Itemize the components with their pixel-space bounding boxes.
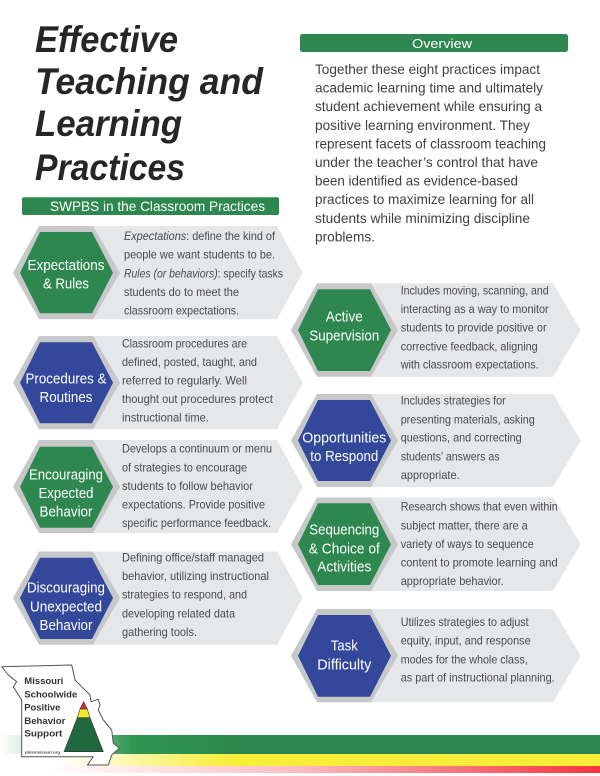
panel: Opportunities to Respond: to Respond <box>310 449 378 465</box>
panel: Task Difficulty <box>291 609 581 702</box>
logo: Missouri map with pyramid: pbismissouri.org <box>25 750 61 754</box>
panel: Expectations & Rules: students do to meet the <box>124 285 239 299</box>
panel: Procedures & Routines: referred to regularly. Well <box>122 374 247 388</box>
panel: Task Difficulty: Difficulty <box>317 657 372 673</box>
panel: Encouraging Expected Behavior: expectations. Provide positive <box>122 498 265 512</box>
overview text <box>315 62 546 244</box>
panel: Expectations & Rules: Rules (or behaviors): specify tasks <box>124 266 283 280</box>
panel: Encouraging Expected Behavior: Encouraging <box>29 467 103 483</box>
panel: Expectations & Rules: classroom expectations. <box>124 303 239 317</box>
panel: Expectations & Rules: & Rules <box>43 277 89 293</box>
overview text: under the teacher’s control that have <box>315 155 538 170</box>
panel: Active Supervision: Active <box>326 310 363 326</box>
panel: Sequencing & Choice of Activities: variety of ways to sequence <box>401 537 534 551</box>
panel: Discouraging Unexpected Behavior: Defining office/staff managed <box>122 551 264 565</box>
panel: Discouraging Unexpected Behavior: behavior, utilizing instructional <box>122 569 269 583</box>
section heading: SWPBS in the Classroom Practices: SWPBS in the Classroom Practices <box>50 199 265 214</box>
logo: Missouri map with pyramid: Behavior <box>24 716 66 726</box>
panel: Sequencing & Choice of Activities: & Choice of <box>309 541 381 557</box>
panel: Sequencing & Choice of Activities: appropriate behavior. <box>401 574 504 588</box>
panel: Active Supervision <box>291 283 581 377</box>
panel: Opportunities to Respond: Includes strategies for <box>401 393 506 407</box>
logo: Missouri map with pyramid: Missouri <box>24 676 63 686</box>
panel: Sequencing & Choice of Activities: Activities <box>317 560 371 576</box>
panel: Sequencing & Choice of Activities: content to promote learning and <box>401 556 558 570</box>
panel: Encouraging Expected Behavior: Behavior <box>40 505 93 521</box>
panel: Expectations & Rules: Expectations <box>28 258 104 274</box>
panel: Expectations & Rules <box>13 226 303 319</box>
panel: Encouraging Expected Behavior: students to follow behavior <box>122 479 253 493</box>
panel: Sequencing & Choice of Activities: subject matter, there are a <box>401 518 528 532</box>
overview text: practices to maximize learning for all <box>315 192 534 207</box>
title <box>35 19 264 188</box>
overview text: student achievement while ensuring a <box>315 99 542 114</box>
title: Practices <box>35 147 185 188</box>
overview heading <box>300 34 568 52</box>
panel: Opportunities to Respond: questions, and correcting <box>401 431 522 445</box>
panel: Task Difficulty: as part of instructional planning. <box>401 671 555 685</box>
panel: Sequencing & Choice of Activities: Research shows that even within <box>401 500 558 514</box>
panel: Discouraging Unexpected Behavior <box>13 551 303 645</box>
panel: Encouraging Expected Behavior <box>13 440 303 533</box>
panel: Encouraging Expected Behavior: Develops a continuum or menu <box>122 442 272 456</box>
overview text: problems. <box>315 229 375 244</box>
logo: Missouri map with pyramid: Schoolwide <box>24 690 77 700</box>
panel: Procedures & Routines: Classroom procedures are <box>122 336 247 350</box>
panel: Opportunities to Respond: Opportunities <box>302 430 386 446</box>
panel: Discouraging Unexpected Behavior: developing related data <box>122 607 235 621</box>
footer color bands <box>0 735 600 773</box>
overview text: students while minimizing discipline <box>315 211 530 226</box>
logo: Missouri map with pyramid: Support <box>24 729 62 739</box>
panel: Discouraging Unexpected Behavior: strategies to respond, and <box>122 588 247 602</box>
panel: Encouraging Expected Behavior: Expected <box>38 486 94 502</box>
panel: Encouraging Expected Behavior: of strategies to encourage <box>122 460 247 474</box>
panel: Task Difficulty: equity, input, and response <box>401 634 531 648</box>
panel: Encouraging Expected Behavior: specific performance feedback. <box>122 516 271 530</box>
panel: Active Supervision: students to provide positive or <box>401 321 547 335</box>
panel: Active Supervision: Supervision <box>309 329 379 345</box>
overview text: academic learning time and ultimately <box>315 81 543 96</box>
panel: Procedures & Routines: Routines <box>40 390 92 406</box>
panel: Task Difficulty: modes for the whole class, <box>401 652 528 666</box>
title: Teaching and <box>35 61 264 102</box>
panel: Sequencing & Choice of Activities: Sequencing <box>309 522 379 538</box>
panel: Procedures & Routines: Procedures & <box>26 371 107 387</box>
panel: Procedures & Routines: instructional time. <box>122 411 209 425</box>
panel: Task Difficulty: Utilizes strategies to adjust <box>401 615 529 629</box>
panel: Opportunities to Respond: students’ answers as <box>401 449 500 463</box>
overview text: Together these eight practices impact <box>315 62 540 77</box>
panel: Procedures & Routines: thought out procedures protect <box>122 392 274 406</box>
title: Learning <box>35 103 182 144</box>
panel: Active Supervision: interacting as a way to monitor <box>401 302 549 316</box>
panel: Discouraging Unexpected Behavior: Discouraging <box>27 581 105 597</box>
panel: Opportunities to Respond <box>291 393 581 487</box>
panel: Opportunities to Respond: appropriate. <box>401 468 460 482</box>
panel: Discouraging Unexpected Behavior: Behavior <box>40 618 93 634</box>
title: Effective <box>35 19 178 60</box>
panel: Discouraging Unexpected Behavior: Unexpected <box>30 600 102 616</box>
panel: Active Supervision: with classroom expectations. <box>400 358 539 372</box>
panel: Task Difficulty: Task <box>331 639 359 655</box>
panel: Expectations & Rules: people we want students to be. <box>124 248 275 262</box>
panel: Expectations & Rules: Expectations: define the kind of <box>124 229 276 243</box>
logo: Missouri map with pyramid: Positive <box>24 703 60 713</box>
overview text: positive learning environment. They <box>315 118 530 133</box>
overview text: represent facets of classroom teaching <box>315 136 546 151</box>
panel: Active Supervision: Includes moving, scanning, and <box>401 283 549 297</box>
panel: Opportunities to Respond: presenting materials, asking <box>401 412 535 426</box>
overview text: been identified as evidence-based <box>315 174 518 189</box>
panel: Sequencing & Choice of Activities <box>291 498 581 591</box>
panel: Discouraging Unexpected Behavior: gathering tools. <box>122 625 197 639</box>
panel: Procedures & Routines <box>13 336 303 429</box>
panel: Active Supervision: corrective feedback, aligning <box>401 339 538 353</box>
overview heading: Overview <box>412 36 473 51</box>
logo: Missouri map with pyramid <box>2 665 119 765</box>
panel: Procedures & Routines: defined, posted, taught, and <box>122 355 257 369</box>
